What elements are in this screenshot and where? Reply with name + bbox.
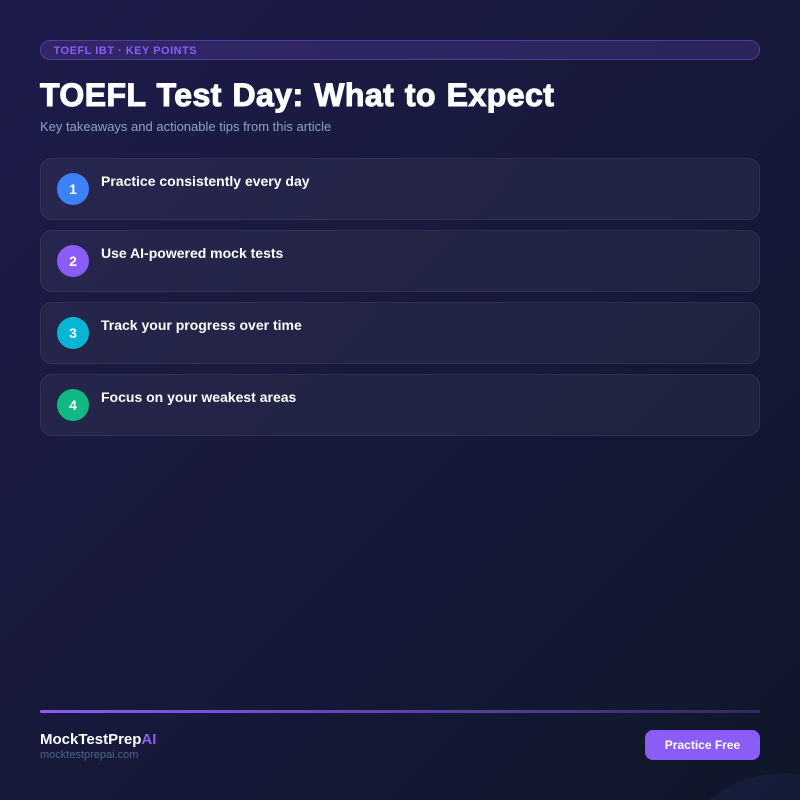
number badge 1 xyxy=(57,173,89,205)
card text 3: Track your progress over time xyxy=(101,317,302,333)
call to action button xyxy=(645,730,760,760)
number badge 3 xyxy=(57,317,89,349)
number badge 1: 1 xyxy=(69,181,77,197)
subtitle: Key takeaways and actionable tips from this article xyxy=(40,119,331,134)
number badge 3: 3 xyxy=(69,325,77,341)
card 3 xyxy=(40,302,760,364)
card text 4: Focus on your weakest areas xyxy=(101,389,296,405)
number badge 4: 4 xyxy=(69,397,77,413)
call to action button: Practice Free xyxy=(665,738,740,752)
brand url: mocktestprepai.com xyxy=(40,749,138,761)
card 1 xyxy=(40,158,760,220)
number badge 2: 2 xyxy=(69,253,77,269)
card 4 xyxy=(40,374,760,436)
brand block xyxy=(40,731,156,761)
badge: category: TOEFL IBT · KEY POINTS xyxy=(54,45,197,57)
number badge 4 xyxy=(57,389,89,421)
badge: category xyxy=(40,40,760,60)
number badge 2 xyxy=(57,245,89,277)
decorative corner circle xyxy=(665,773,800,800)
brand name: MockTestPrepAI xyxy=(40,731,156,748)
title: TOEFL Test Day: What to Expect xyxy=(40,77,554,113)
card text 2: Use AI-powered mock tests xyxy=(101,245,283,261)
card 2 xyxy=(40,230,760,292)
card text 1: Practice consistently every day xyxy=(101,173,310,189)
accent divider bar xyxy=(40,710,760,713)
